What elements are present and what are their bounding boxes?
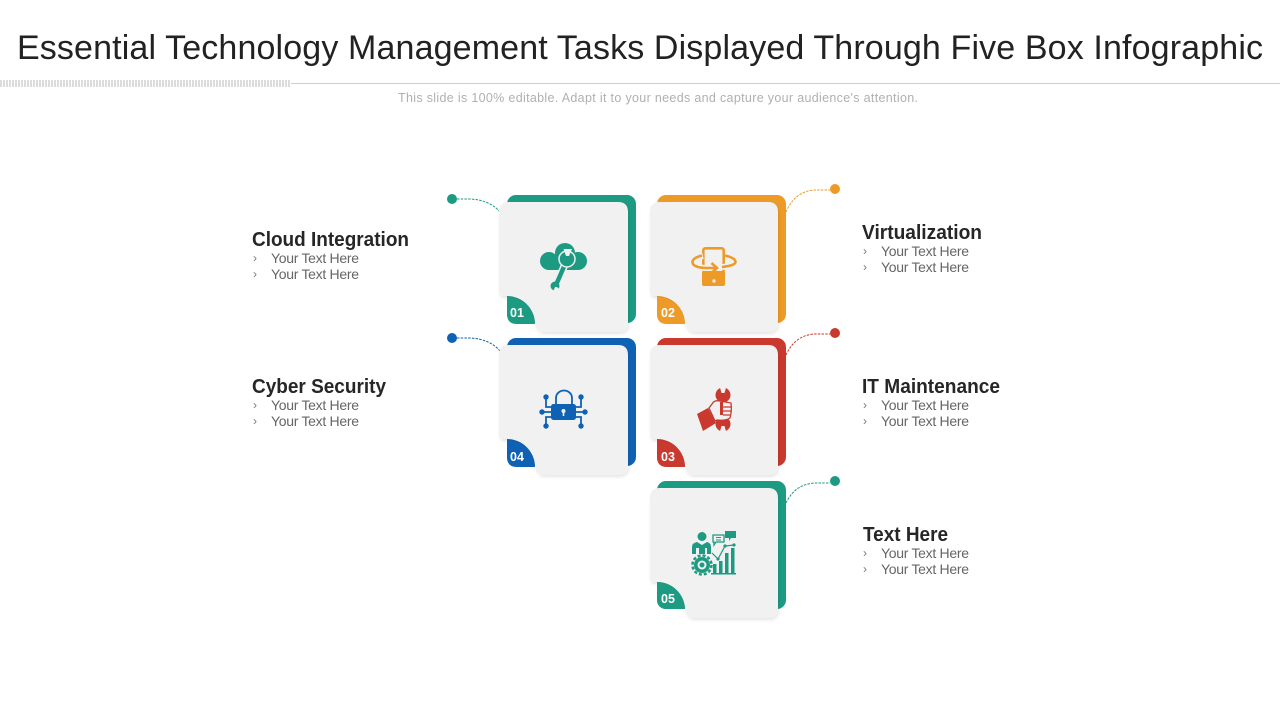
icon: engineer with gear and growth chart	[692, 531, 736, 574]
text block: cloud integration: Cloud Integration	[252, 229, 409, 251]
number tab 04	[507, 440, 535, 467]
text block: virtualization: ›	[863, 244, 867, 258]
text block: cyber security: ›	[253, 414, 257, 428]
back plate 05	[657, 481, 786, 609]
text block: virtualization	[862, 222, 982, 275]
title: Essential Technology Management Tasks Displayed Through Five Box Infographic	[17, 29, 1263, 67]
back plate 02	[657, 195, 786, 323]
text block: virtualization: Your Text Here	[881, 243, 969, 259]
text block: IT maintenance: IT Maintenance	[862, 376, 1000, 398]
text block: IT maintenance: Your Text Here	[881, 413, 969, 429]
text block: cloud integration: ›	[253, 267, 257, 281]
connector and dot 01	[447, 194, 500, 212]
text block: text here: ›	[863, 562, 867, 576]
panel: 04 cyber security card	[447, 333, 636, 475]
text block: cloud integration: ›	[253, 251, 257, 265]
back plate 01	[507, 195, 636, 323]
front card 01	[499, 202, 628, 332]
panel: 05 text here card	[650, 476, 840, 618]
text block: text here: Your Text Here	[881, 545, 969, 561]
text block: virtualization: ›	[863, 260, 867, 274]
back plate 03	[657, 338, 786, 466]
icon: phone with rotation arrow	[692, 248, 736, 286]
back plate 04	[507, 338, 636, 466]
connector and dot 05	[786, 476, 840, 503]
text block: virtualization: Your Text Here	[881, 259, 969, 275]
text block: cloud integration	[252, 229, 409, 282]
text block: cyber security: Your Text Here	[271, 413, 359, 429]
text block: text here: ›	[863, 546, 867, 560]
number tab 03: 03	[661, 450, 675, 464]
icon: padlock circuit	[539, 391, 588, 429]
front card 02	[650, 202, 778, 332]
text block: cloud integration: Your Text Here	[271, 266, 359, 282]
text block: IT maintenance	[862, 376, 1000, 429]
connector and dot 02	[786, 184, 840, 212]
text block: cyber security: ›	[253, 398, 257, 412]
text block: IT maintenance: ›	[863, 414, 867, 428]
text block: text here: Text Here	[863, 524, 948, 546]
front card 04	[499, 345, 628, 475]
text block: text here: Your Text Here	[881, 561, 969, 577]
number tab 05	[657, 582, 685, 609]
number tab 01	[507, 297, 535, 324]
subtitle: This slide is 100% editable. Adapt it to your needs and capture your audience's attention.	[398, 91, 918, 105]
text block: cyber security	[252, 376, 387, 429]
connector and dot 04	[447, 333, 500, 351]
number tab 04: 04	[510, 450, 524, 464]
panel: 03 IT maintenance card	[650, 328, 840, 475]
text block: IT maintenance: ›	[863, 398, 867, 412]
icon: cloud with wrench	[540, 243, 587, 292]
front card 05	[650, 488, 778, 618]
icon: hand holding wrench	[697, 386, 731, 433]
text block: virtualization: Virtualization	[862, 222, 982, 244]
text block: cyber security: Your Text Here	[271, 397, 359, 413]
number tab 05: 05	[661, 592, 675, 606]
number tab 01: 01	[510, 306, 524, 320]
front card 03	[650, 345, 778, 475]
text block: IT maintenance: Your Text Here	[881, 397, 969, 413]
connector and dot 03	[786, 328, 840, 355]
text block: text here	[863, 524, 969, 577]
text block: cloud integration: Your Text Here	[271, 250, 359, 266]
title rule	[0, 80, 1280, 87]
panel: 02 virtualization card	[650, 184, 840, 332]
text block: cyber security: Cyber Security	[252, 376, 387, 398]
number tab 02: 02	[661, 306, 675, 320]
number tab 03	[657, 440, 685, 467]
panel: 01 cloud integration card	[447, 194, 636, 332]
number tab 02	[657, 297, 685, 324]
